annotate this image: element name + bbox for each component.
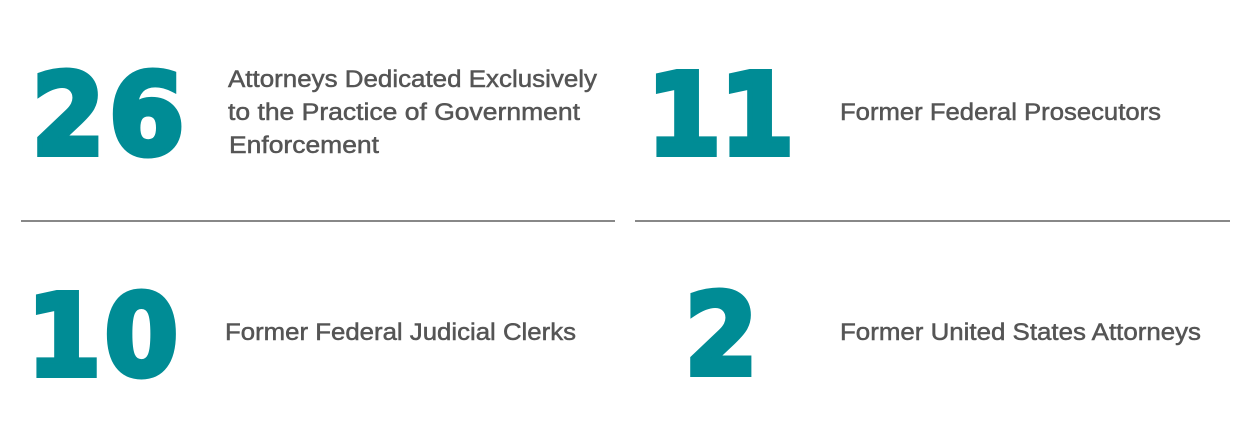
text: clerks description: Former Federal Judicial Clerks <box>225 319 576 346</box>
number: 2: 2 <box>685 270 758 401</box>
number: 10: 0 <box>105 271 178 402</box>
text: attorneys description: Enforcement <box>229 132 379 159</box>
number: 11: 1 <box>720 50 794 181</box>
stat panel: 2 US attorneys <box>685 270 1201 401</box>
number: 11: 1 <box>647 50 721 181</box>
number: 26: 2 <box>32 50 105 181</box>
divider right <box>635 220 1230 222</box>
text: prosecutors description: Former Federal Prosecutors <box>840 99 1161 126</box>
text: attorneys description <box>228 66 597 159</box>
stat panel: 10 clerks <box>27 271 576 402</box>
text: US attorneys description: Former United States Attorneys <box>840 319 1201 346</box>
text: attorneys description: Attorneys Dedicated Exclusively <box>228 66 597 93</box>
number: 10: 1 <box>27 271 101 402</box>
number: 26: 6 <box>109 50 184 180</box>
divider left <box>21 220 615 222</box>
text: attorneys description: to the Practice of Government <box>228 99 580 126</box>
stat panel: 11 prosecutors <box>647 50 1161 181</box>
number: 11 <box>647 50 794 181</box>
number: 26 <box>32 50 184 181</box>
number: 10 <box>27 271 178 402</box>
stat panel: 26 attorneys <box>32 50 597 181</box>
